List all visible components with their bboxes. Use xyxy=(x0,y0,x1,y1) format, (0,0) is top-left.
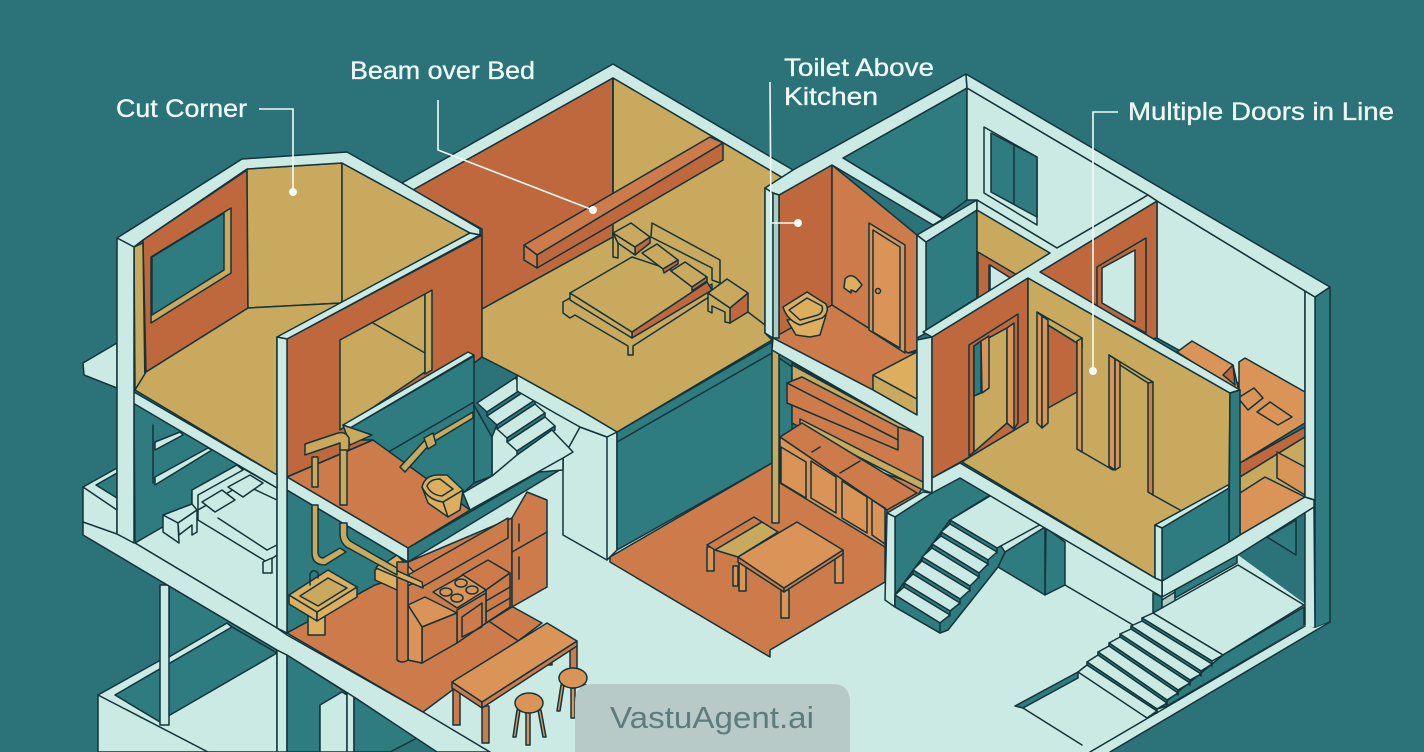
door B xyxy=(1037,312,1113,470)
ground floor centre walls xyxy=(517,342,772,560)
right outer top wall band xyxy=(966,74,1330,297)
watermark xyxy=(575,684,850,752)
lower right stepped terrace xyxy=(1015,287,1330,752)
lower left room xyxy=(98,585,417,752)
toilet on slab xyxy=(422,475,463,517)
dining floor xyxy=(610,440,923,657)
lower right stairs xyxy=(1078,613,1223,718)
stair room xyxy=(885,478,990,607)
ground floor slab xyxy=(277,375,1330,752)
posts around toilet room xyxy=(917,200,977,338)
kitchen base cabinet xyxy=(408,597,457,663)
wash basin xyxy=(289,570,357,635)
door A xyxy=(969,314,1018,456)
label: Multiple Doors in Line: Multiple Doors in Line xyxy=(1128,98,1394,126)
low teal wall xyxy=(932,463,1229,597)
multiple doors wall xyxy=(923,195,1240,578)
slab top over stairs xyxy=(463,430,573,510)
beam over bed xyxy=(524,137,723,268)
far room ochre with door xyxy=(977,210,1050,298)
vertical pipe at kitchen xyxy=(376,562,423,662)
upper slab over kitchen xyxy=(287,235,563,562)
upper left room xyxy=(117,152,480,633)
upper right bedroom slice xyxy=(1157,201,1315,597)
kitchen and plumbing space xyxy=(287,490,547,712)
toilet room xyxy=(765,74,967,493)
central staircase xyxy=(895,493,1045,633)
back terracotta wall with door xyxy=(1040,201,1157,340)
label: Multiple Doors in Line xyxy=(1089,98,1394,375)
terracotta table and stools xyxy=(452,623,589,745)
kitchen wall and cabinets xyxy=(779,358,923,547)
label: Toilet Above Kitchen xyxy=(770,54,934,227)
bedroom with beam room walls xyxy=(402,64,793,437)
label: Cut Corner: Cut Corner xyxy=(116,95,247,123)
bed xyxy=(563,223,765,355)
back mint wall with window xyxy=(967,88,1148,248)
label: Beam over Bed xyxy=(350,57,597,214)
door C xyxy=(1109,355,1180,510)
upper stairs xyxy=(474,375,580,483)
watermark: VastuAgent.ai xyxy=(610,700,814,735)
stair support xyxy=(998,527,1065,595)
kitchen stove xyxy=(433,575,486,643)
label: Toilet Above Kitchen: Kitchen xyxy=(784,83,878,111)
ochre column xyxy=(772,350,779,523)
plumbing pipes xyxy=(305,412,473,575)
left post and ledge xyxy=(83,238,277,543)
label: Toilet Above Kitchen: Toilet Above xyxy=(784,54,934,82)
label: Beam over Bed: Beam over Bed xyxy=(350,57,535,85)
main long floor band xyxy=(83,522,490,752)
left band and lower left bedroom xyxy=(83,400,277,628)
dining table xyxy=(707,517,843,618)
label: Cut Corner xyxy=(116,95,297,196)
